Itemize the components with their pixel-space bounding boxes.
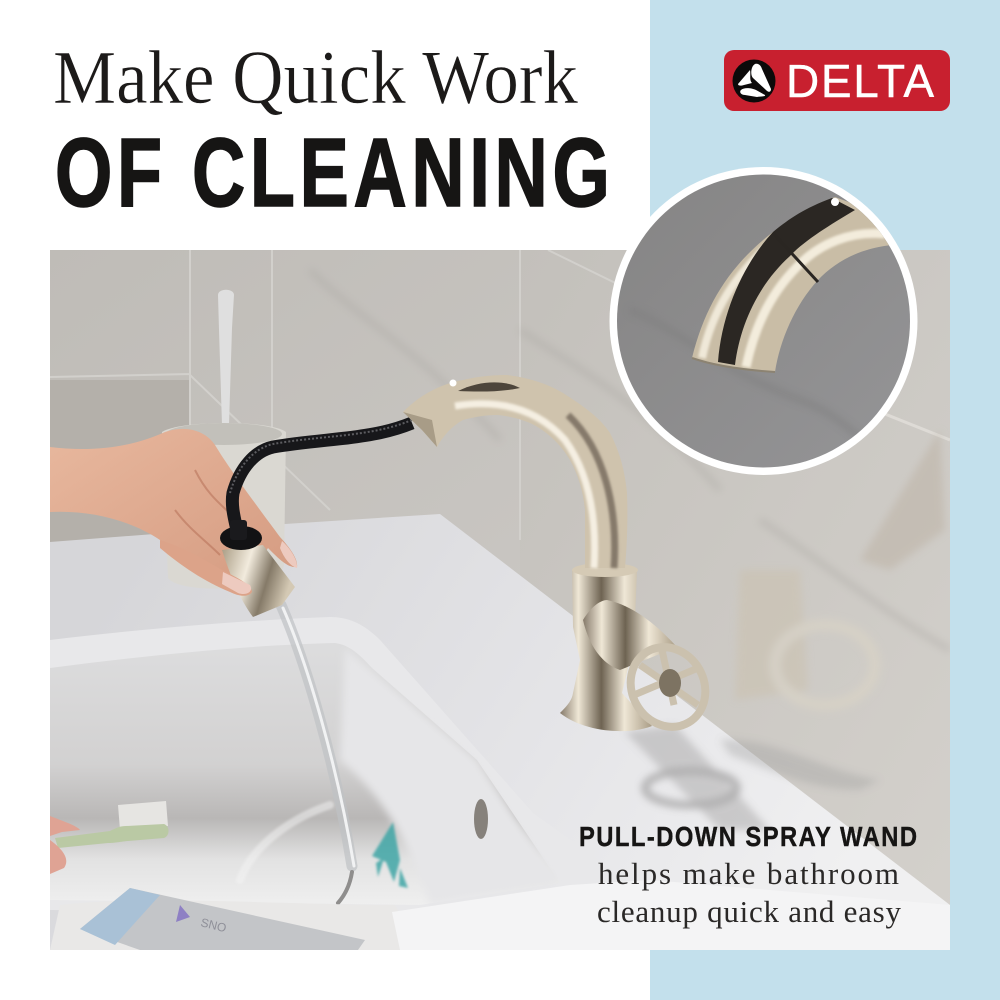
handle housing [583, 600, 677, 670]
faucet reflection on wall [735, 430, 945, 705]
water stream [240, 605, 354, 903]
front counter and towel [50, 880, 700, 950]
tiled wall [50, 250, 950, 950]
bathroom photo [50, 250, 950, 950]
caption [579, 820, 918, 929]
spray wand head [220, 520, 295, 617]
caption: cleanup quick and easy [597, 894, 902, 929]
faucet body and base [560, 570, 652, 731]
toothpaste tube: SNO [199, 915, 228, 935]
shadow of faucet on counter [625, 725, 880, 830]
spout close-up [692, 197, 892, 372]
drain overflow hole [474, 799, 488, 839]
caption: PULL-DOWN SPRAY WAND [579, 820, 918, 852]
green toothbrush and fingers [50, 801, 168, 874]
Delta logo [724, 50, 950, 111]
title [53, 36, 615, 227]
faucet spout [403, 375, 627, 568]
toothbrush holder cup [162, 290, 286, 589]
thumb and fingernails over wand [160, 540, 297, 596]
caption: helps make bathroom [598, 856, 899, 891]
counter top [50, 514, 950, 950]
Delta logo: DELTA [786, 55, 934, 107]
sink basin [50, 617, 537, 910]
teal toothbrush reflection [372, 822, 408, 888]
faucet [403, 375, 720, 741]
hand holding wand [50, 429, 297, 590]
toothpaste tube [80, 888, 365, 950]
title: Make Quick Work [53, 36, 578, 120]
title: OF CLEANING [55, 119, 615, 227]
inset circle showing spout detail [610, 167, 920, 480]
pull-down hose [230, 420, 412, 530]
wheel handle [626, 644, 710, 731]
